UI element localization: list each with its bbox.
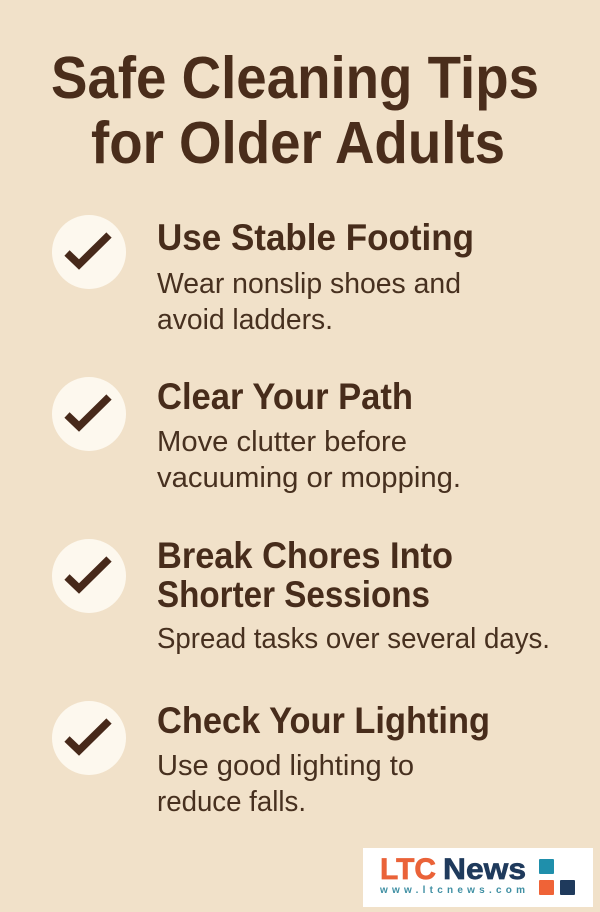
text: clear path detail [157,426,461,494]
heading: check your lighting: Check Your Lighting [157,700,490,741]
heading: clear your path: Clear Your Path [157,376,413,417]
text: lighting detail: Use good lighting to [157,750,414,782]
icon: check mark 4 [52,701,126,775]
text: lighting detail [157,750,414,818]
title: Safe Cleaning Tips [51,45,539,111]
logo: LTC News [363,848,593,907]
icon: check mark 3 [52,539,126,613]
text: clear path detail: Move clutter before [157,426,407,458]
text: clear path detail: vacuuming or mopping. [157,462,461,494]
panel: tip 3 shorter sessions [52,535,550,655]
logo wordmark: News [443,853,526,886]
panel: tip 1 stable footing [52,215,474,336]
text: stable footing detail: avoid ladders. [157,304,333,336]
heading: break chores into shorter sessions: Break Chores Into [157,535,453,576]
logo squares [539,859,575,895]
text: shorter sessions detail: Spread tasks over several days. [157,623,550,655]
heading: break chores into shorter sessions [157,535,453,615]
logo url: www.ltcnews.com [379,885,525,896]
text: lighting detail: reduce falls. [157,786,306,818]
panel: tip 4 lighting [52,700,490,818]
title [51,45,539,176]
panel: tip 2 clear path [52,376,461,494]
heading: break chores into shorter sessions: Shorter Sessions [157,574,430,615]
logo wordmark [380,853,526,886]
text: stable footing detail: Wear nonslip shoes and [157,268,461,300]
icon: check mark 1 [52,215,126,289]
title: for Older Adults [91,110,505,176]
logo wordmark: LTC [380,853,436,886]
text: stable footing detail [157,268,461,336]
heading: use stable footing: Use Stable Footing [157,217,474,258]
icon: check mark 2 [52,377,126,451]
